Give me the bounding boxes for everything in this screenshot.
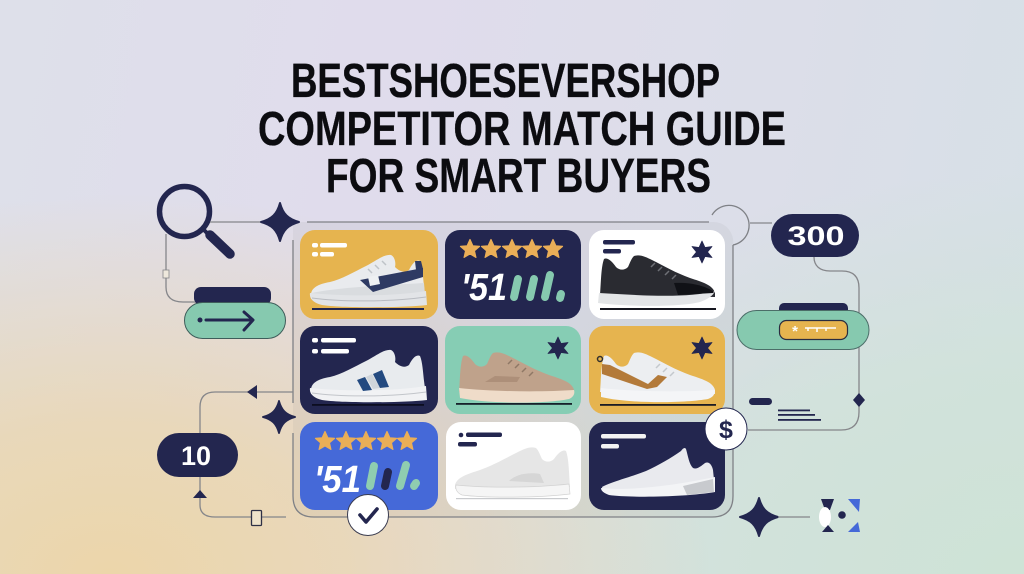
card: yellow sneaker with navy stripe bbox=[300, 230, 438, 319]
pill: green arrow button bbox=[184, 287, 286, 338]
icon: check badge bbox=[348, 494, 388, 536]
rating bars bbox=[514, 275, 561, 298]
rating score text: '51 bbox=[461, 267, 507, 309]
card: navy with white low sneaker bbox=[589, 422, 725, 510]
icon: dollar badge bbox=[705, 408, 747, 450]
connectors: right side bbox=[748, 223, 859, 430]
title: COMPETITOR MATCH GUIDE bbox=[258, 102, 786, 156]
arrow: left pointing triangle bbox=[247, 385, 257, 399]
stars rating bbox=[316, 432, 416, 449]
text lines: small legend bbox=[749, 398, 821, 421]
rating score text: '51 bbox=[314, 459, 361, 501]
pill: number 10 bbox=[157, 433, 238, 477]
card: white with black sneaker bbox=[589, 230, 725, 319]
card: navy rating score bbox=[445, 230, 581, 319]
icon: diamond node bbox=[853, 393, 865, 407]
title: BESTSHOESEVERSHOP bbox=[291, 54, 720, 108]
icon: dollar badge: $ bbox=[719, 416, 733, 444]
connector: magnifier to sparkle and green pill bbox=[163, 222, 264, 302]
arrow: up triangle bbox=[193, 490, 207, 498]
pill: number 300 bbox=[771, 214, 859, 257]
panel: product grid frame bbox=[293, 205, 749, 517]
icon: small rectangle node bbox=[252, 510, 262, 526]
rating bars bbox=[370, 465, 416, 486]
icon: abstract logo bbox=[819, 499, 860, 532]
card: navy with white sneaker, blue stripes bbox=[300, 326, 438, 414]
card: green with tan sneaker bbox=[445, 326, 581, 414]
pill: number 10: 10 bbox=[181, 441, 211, 471]
card: blue rating score bbox=[300, 422, 438, 510]
icon: sparkle bottom right bbox=[740, 498, 778, 536]
connector: panel to number 10 bbox=[200, 392, 293, 517]
icon: magnifying glass bbox=[160, 186, 230, 254]
icon: sparkle top left bbox=[261, 203, 299, 241]
stars rating bbox=[460, 240, 562, 257]
card: white with white sneaker bbox=[446, 422, 581, 510]
pill: number 300: 300 bbox=[788, 221, 844, 251]
tag: orange rating label: * bbox=[792, 323, 798, 340]
pill: green with orange tag bbox=[737, 303, 869, 350]
title bbox=[258, 54, 786, 203]
icon: sparkle lower left bbox=[263, 401, 295, 433]
title: FOR SMART BUYERS bbox=[326, 149, 711, 203]
card: yellow with white and brown sneaker bbox=[589, 326, 725, 414]
connector: sparkle to logo bbox=[778, 516, 810, 518]
